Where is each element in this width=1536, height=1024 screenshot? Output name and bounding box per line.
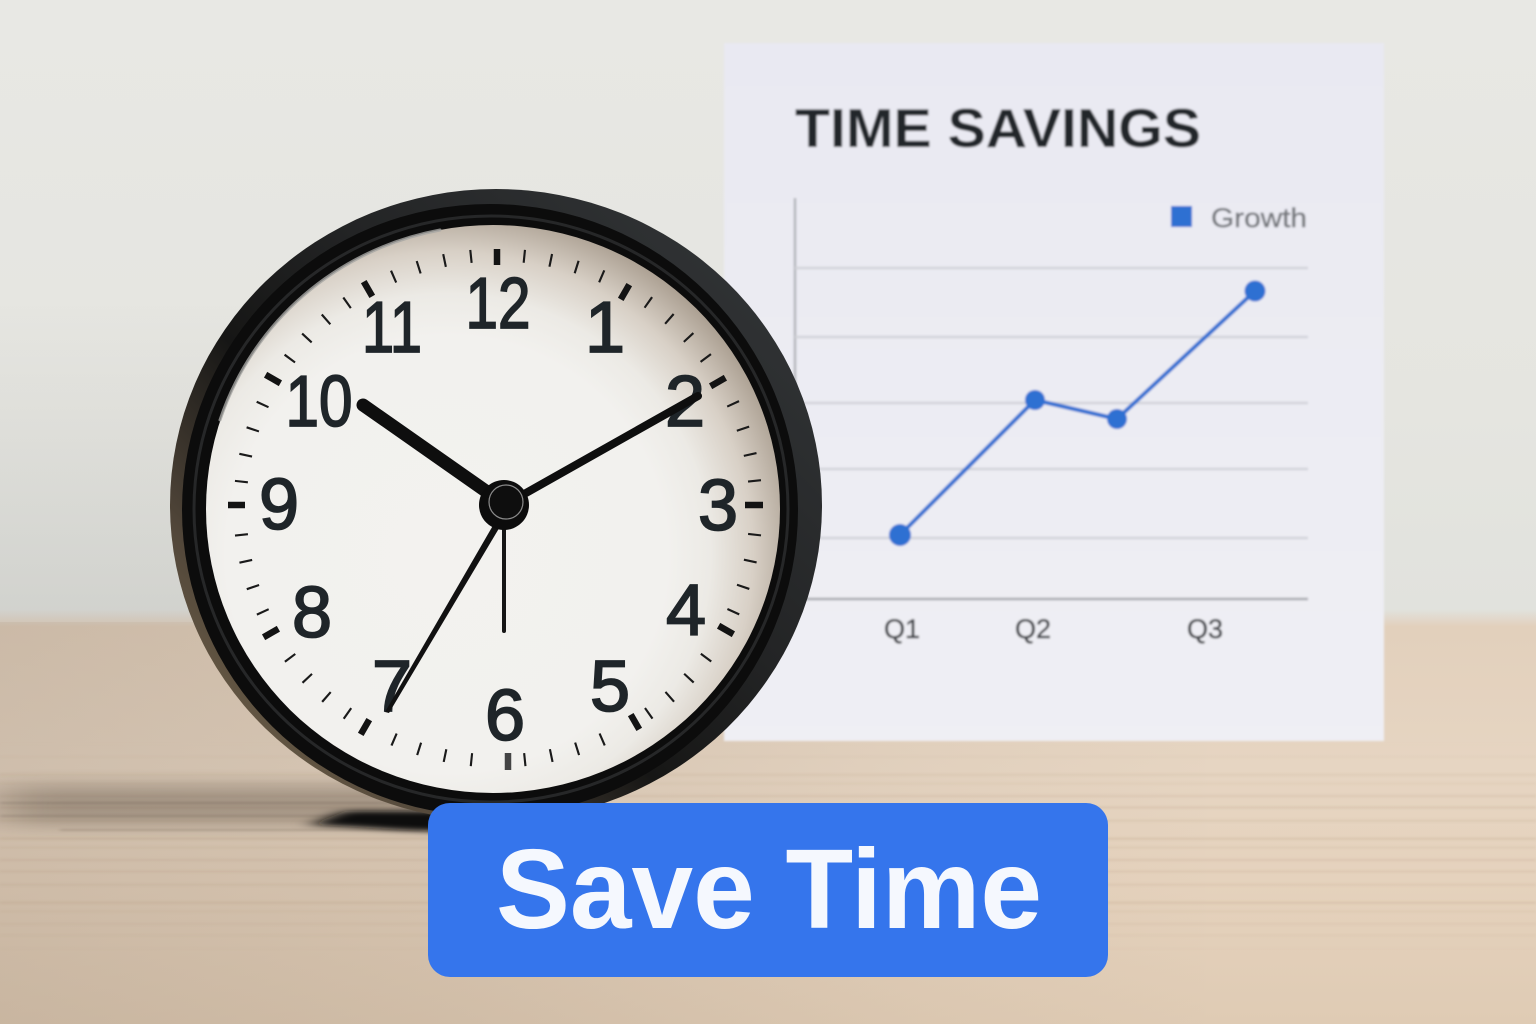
- clock numerals: 11: [362, 288, 422, 368]
- clock face: [206, 225, 780, 793]
- line chart: [795, 198, 1308, 644]
- clock numerals: 1: [585, 288, 625, 368]
- clock numerals: 12: [466, 264, 530, 344]
- minute hand: [526, 396, 698, 493]
- button: save time: [428, 803, 1108, 977]
- axis labels: [884, 614, 1223, 644]
- clock numerals: 9: [259, 465, 299, 545]
- clock pivot: [479, 480, 529, 530]
- clock hands: [363, 396, 698, 631]
- heading: time savings: TIME SAVINGS: [795, 97, 1201, 159]
- clock numerals: 6: [485, 676, 525, 756]
- clock shadow on desk: [310, 811, 560, 836]
- panel: time savings chart card: [724, 43, 1384, 741]
- clock numerals: 3: [698, 466, 738, 546]
- clock numerals: [259, 264, 738, 756]
- axis labels: Q2: [1015, 614, 1051, 644]
- clock numerals: 8: [292, 573, 332, 653]
- clock numerals: 4: [666, 571, 706, 651]
- legend: growth: Growth: [1211, 203, 1307, 233]
- second hand: [385, 522, 501, 713]
- hour hand: [363, 405, 490, 494]
- button: save time: Save Time: [496, 826, 1042, 952]
- clock numerals: 7: [372, 647, 412, 727]
- axis labels: Q1: [884, 614, 920, 644]
- clock casing: [170, 189, 822, 821]
- legend: growth: [1171, 203, 1307, 233]
- clock numerals: 2: [665, 362, 705, 442]
- clock numerals: 10: [286, 362, 352, 442]
- minute ticks: [240, 255, 756, 761]
- growth line: [900, 291, 1255, 535]
- clock numerals: 5: [590, 647, 630, 727]
- small hand: [502, 525, 506, 631]
- icon: alarm clock: [170, 189, 822, 821]
- hour ticks: [228, 249, 763, 770]
- axis labels: Q3: [1187, 614, 1223, 644]
- wooden desk: [0, 622, 1536, 1024]
